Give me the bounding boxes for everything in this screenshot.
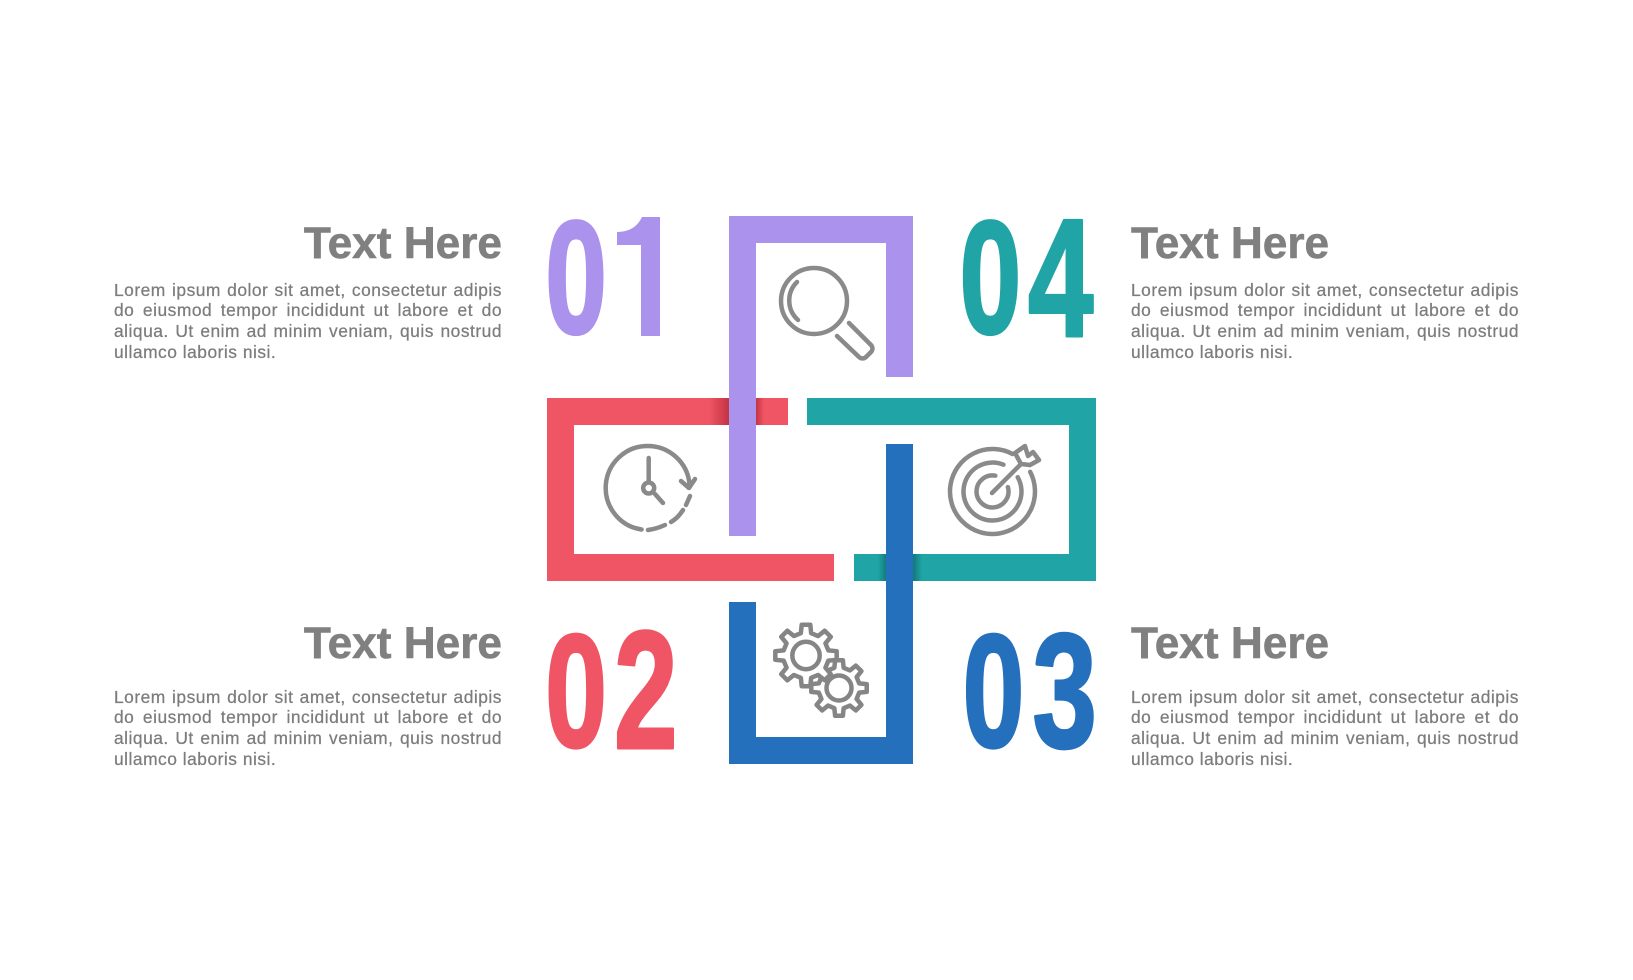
- body 04: [1131, 280, 1519, 362]
- body 03: do eiusmod tempor incididunt ut labore et do: [1131, 707, 1519, 727]
- text block: step 03: [1131, 619, 1519, 769]
- body 01: [114, 280, 502, 362]
- body 01: Lorem ipsum dolor sit amet, consectetur adipis: [114, 280, 502, 300]
- number 03: [963, 599, 1097, 782]
- number 04: [960, 184, 1093, 372]
- number 02: 2: [614, 597, 678, 784]
- body 03: [1131, 686, 1519, 769]
- heading 04: Text Here: [1131, 219, 1329, 268]
- number 02: [545, 597, 678, 784]
- body 02: aliqua. Ut enim ad minim veniam, quis nostrud: [114, 728, 502, 748]
- body 03: aliqua. Ut enim ad minim veniam, quis nostrud: [1131, 728, 1519, 748]
- body 02: do eiusmod tempor incididunt ut labore et do: [114, 707, 502, 727]
- heading 03: Text Here: [1131, 619, 1329, 668]
- text block: step 01: [114, 219, 502, 362]
- number 01: [548, 217, 660, 336]
- number 02: 0: [545, 602, 607, 781]
- body 02: Lorem ipsum dolor sit amet, consectetur adipis: [114, 686, 502, 706]
- body 01: do eiusmod tempor incididunt ut labore et do: [114, 300, 502, 320]
- body 02: [114, 686, 502, 769]
- blue frame: [729, 444, 913, 764]
- icon: clock: [606, 446, 695, 530]
- heading 02: Text Here: [304, 619, 502, 668]
- body 01: ullamco laboris nisi.: [114, 342, 276, 362]
- body 03: ullamco laboris nisi.: [1131, 749, 1293, 769]
- heading 01: Text Here: [304, 219, 502, 268]
- number 03: 0: [963, 602, 1024, 781]
- infographic diagram: [547, 216, 1096, 764]
- red frame: [547, 398, 834, 581]
- number 01: 0: [545, 189, 607, 368]
- text block: step 04: [1131, 219, 1519, 362]
- number 01: 1: [619, 186, 675, 373]
- body 04: ullamco laboris nisi.: [1131, 342, 1293, 362]
- body 04: Lorem ipsum dolor sit amet, consectetur adipis: [1131, 280, 1519, 300]
- number 04: 4: [1028, 184, 1093, 372]
- body 04: aliqua. Ut enim ad minim veniam, quis nostrud: [1131, 321, 1519, 341]
- purple frame: [729, 216, 913, 536]
- body 01: aliqua. Ut enim ad minim veniam, quis nostrud: [114, 321, 502, 341]
- body 03: Lorem ipsum dolor sit amet, consectetur adipis: [1131, 686, 1519, 706]
- number 03: 3: [1032, 599, 1097, 782]
- icon: gears: [775, 625, 867, 716]
- body 04: do eiusmod tempor incididunt ut labore et do: [1131, 300, 1519, 320]
- text block: step 02: [114, 619, 502, 769]
- teal frame: [807, 398, 1096, 581]
- body 02: ullamco laboris nisi.: [114, 749, 276, 769]
- number 04: 0: [960, 189, 1021, 368]
- icon: target: [950, 446, 1039, 534]
- icon: magnifier: [781, 268, 872, 358]
